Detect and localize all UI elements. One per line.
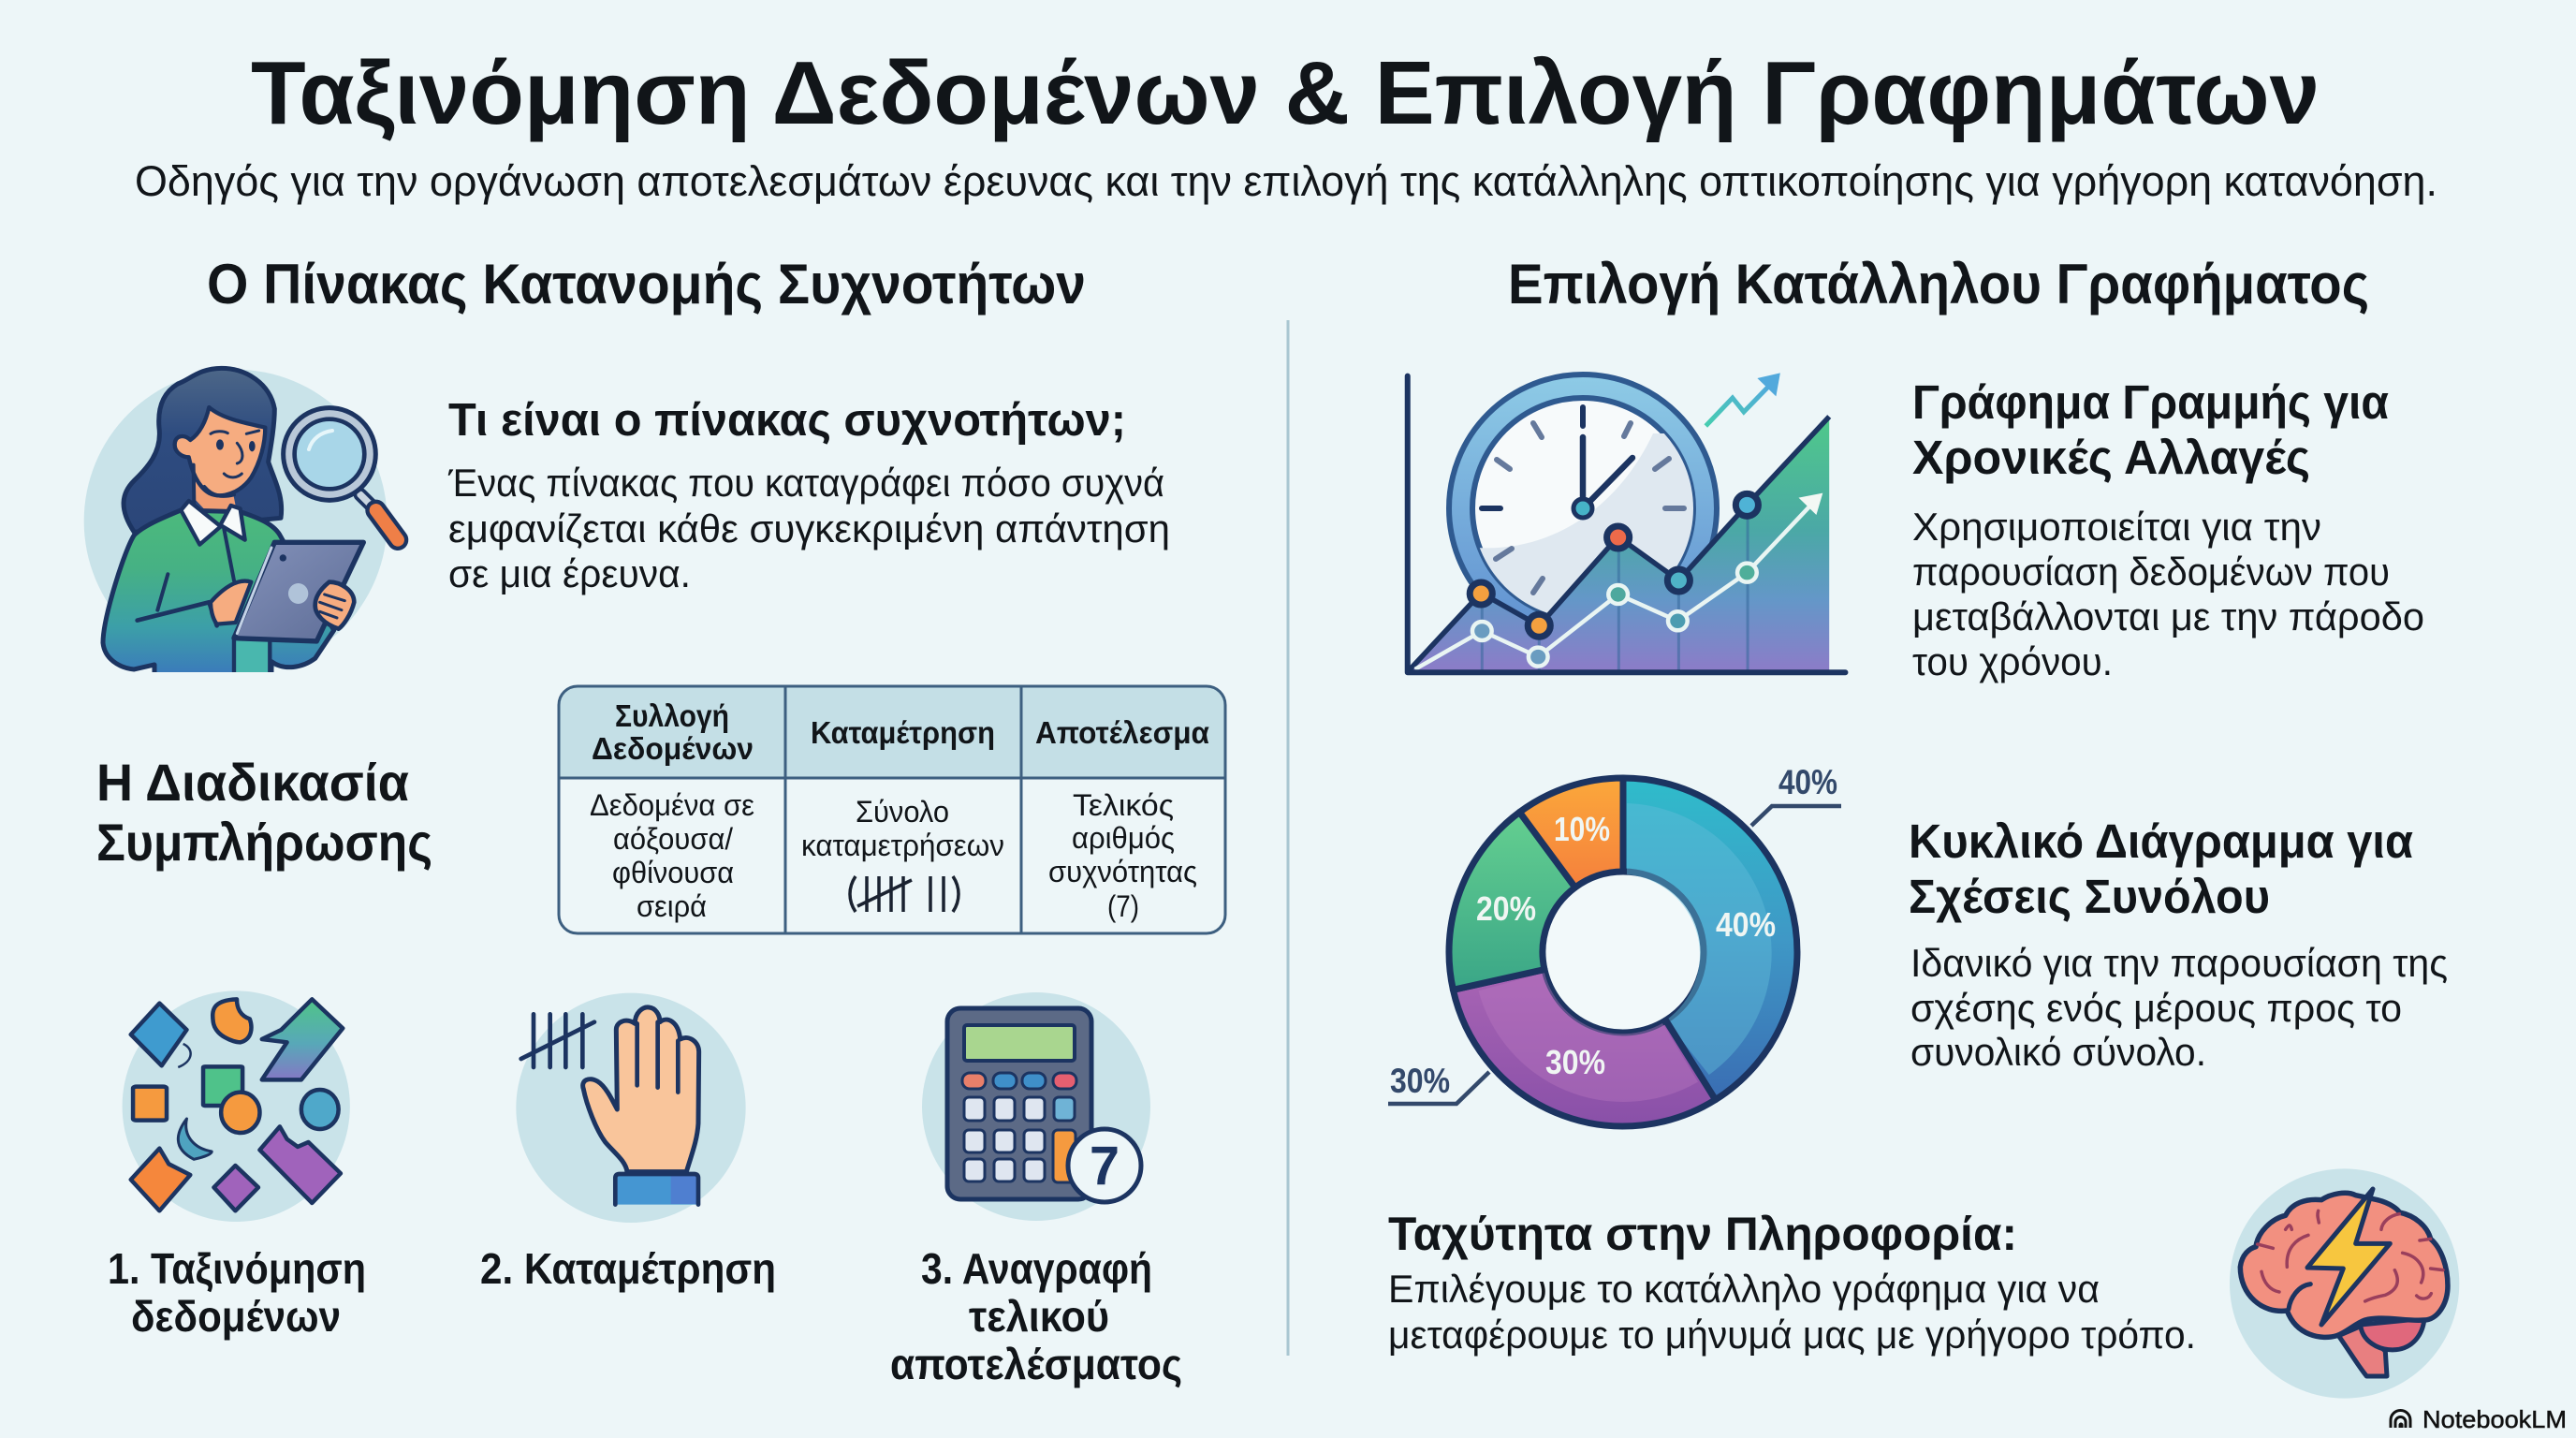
donut segment 30% highlight bbox=[1479, 973, 1698, 1102]
table body cells: καταμετρήσεων bbox=[801, 829, 1004, 862]
donut text: σχέσης ενός μέρους προς το bbox=[1910, 986, 2402, 1030]
heading: what is the table: Τι είναι ο πίνακας συχνοτήτων; bbox=[448, 395, 1126, 446]
donut inner labels: 40% bbox=[1716, 905, 1776, 944]
table body cells: αριθμός bbox=[1072, 821, 1175, 855]
donut segment 40% bbox=[1623, 778, 1797, 1100]
step 3 label: αποτελέσματος bbox=[890, 1340, 1182, 1388]
step 3 label: τελικού bbox=[969, 1292, 1109, 1341]
donut inner labels: 10% bbox=[1554, 810, 1610, 848]
donut segment 10% bbox=[1519, 778, 1623, 888]
table: process columns bbox=[559, 686, 1225, 933]
definition text: εμφανίζεται κάθε συγκεκριμένη απάντηση bbox=[448, 506, 1170, 550]
icon: brain with lightning bbox=[2230, 1168, 2459, 1399]
line chart bbox=[1408, 373, 1845, 672]
line chart text: παρουσίαση δεδομένων που bbox=[1912, 550, 2390, 594]
donut segment 30% bbox=[1453, 970, 1716, 1126]
donut inner labels: 20% bbox=[1476, 889, 1536, 928]
speed text: μεταφέρουμε το μήνυμά μας με γρήγορο τρόπο. bbox=[1388, 1313, 2196, 1357]
heading: left column: Ο Πίνακας Κατανομής Συχνοτήτων bbox=[207, 253, 1086, 315]
table body cells: συχνότητας bbox=[1048, 855, 1197, 888]
icon: clock over line chart bbox=[1408, 373, 1845, 672]
table body cells: Δεδομένα σε bbox=[590, 788, 754, 822]
table header cells: Συλλογή bbox=[615, 698, 729, 733]
panel: what is a frequency table bbox=[447, 395, 1170, 595]
line chart text: μεταβάλλονται με την πάροδο bbox=[1912, 594, 2424, 638]
heading: completion process: Η Διαδικασία bbox=[96, 753, 409, 812]
icon: scattered shapes bbox=[123, 990, 350, 1222]
line chart heading bbox=[1912, 375, 2389, 484]
step 3 label: 3. Αναγραφή bbox=[921, 1244, 1152, 1293]
line chart text: του χρόνου. bbox=[1912, 639, 2113, 683]
donut text: Ιδανικό για την παρουσίαση της bbox=[1910, 941, 2448, 985]
definition text: Ένας πίνακας που καταγράφει πόσο συχνά bbox=[447, 461, 1164, 505]
line chart text bbox=[1912, 505, 2424, 683]
step 1 label bbox=[108, 1244, 366, 1341]
step labels bbox=[108, 1244, 1182, 1388]
callout 30% bbox=[1388, 1062, 1489, 1104]
icon: calculator with result 7 bbox=[922, 992, 1150, 1221]
table body cells: Σύνολο bbox=[856, 795, 949, 829]
table header cells: Δεδομένων bbox=[592, 731, 754, 766]
icon: researcher with tablet and magnifier bbox=[84, 368, 398, 677]
panel: line chart description bbox=[1912, 375, 2424, 683]
donut hole bbox=[1543, 872, 1704, 1033]
table header cells: Αποτέλεσμα bbox=[1035, 715, 1209, 750]
icon: calculator with result 7: 7 bbox=[1090, 1136, 1120, 1196]
clock bbox=[1446, 372, 1720, 616]
callout 40% bbox=[1751, 763, 1841, 826]
column divider bbox=[1286, 320, 1290, 1356]
donut heading bbox=[1909, 814, 2413, 923]
speed heading: Ταχύτητα στην Πληροφορία: bbox=[1388, 1208, 2017, 1260]
title: Ταξινόμηση Δεδομένων & Επιλογή Γραφημάτων bbox=[251, 43, 2320, 143]
donut inner labels: 30% bbox=[1545, 1043, 1605, 1081]
donut segment 20% bbox=[1449, 813, 1575, 990]
tally marks bbox=[850, 876, 959, 912]
donut text: συνολικό σύνολο. bbox=[1910, 1030, 2206, 1074]
donut heading: Κυκλικό Διάγραμμα για bbox=[1909, 814, 2413, 868]
callout 40%: 40% bbox=[1778, 763, 1837, 801]
chart: donut bbox=[1388, 763, 1841, 1126]
table body cells: αόξουσα/ bbox=[613, 822, 733, 856]
heading: completion process: Συμπλήρωσης bbox=[96, 813, 432, 872]
panel: donut description bbox=[1909, 814, 2448, 1074]
callout 30%: 30% bbox=[1390, 1062, 1450, 1100]
subtitle: Οδηγός για την οργάνωση αποτελεσμάτων έρευνας και την επιλογή της κατάλληλης οπτικοποίησης για γρήγορη κατανόηση. bbox=[135, 157, 2437, 205]
donut inner labels bbox=[1476, 810, 1776, 1081]
donut heading: Σχέσεις Συνόλου bbox=[1909, 870, 2270, 923]
step 3 label bbox=[890, 1244, 1182, 1388]
icon: hand with tally marks bbox=[516, 993, 746, 1223]
table header cells: Καταμέτρηση bbox=[811, 715, 995, 750]
donut segment 40% highlight bbox=[1627, 803, 1772, 1075]
table body cells bbox=[590, 788, 1197, 923]
panel: speed of information bbox=[1388, 1208, 2196, 1357]
line chart text: Χρησιμοποιείται για την bbox=[1912, 505, 2321, 549]
definition text bbox=[447, 461, 1170, 595]
speed text: Επιλέγουμε το κατάλληλο γράφημα για να bbox=[1388, 1267, 2100, 1311]
definition text: σε μια έρευνα. bbox=[448, 551, 691, 595]
speed text bbox=[1388, 1267, 2196, 1357]
donut text bbox=[1910, 941, 2448, 1074]
step 2 label: 2. Καταμέτρηση bbox=[480, 1244, 776, 1293]
step 1 label: δεδομένων bbox=[131, 1292, 341, 1341]
table header cells bbox=[592, 698, 1209, 766]
line chart heading: Γράφημα Γραμμής για bbox=[1912, 375, 2389, 429]
table body cells: σειρά bbox=[637, 889, 707, 923]
line chart heading: Χρονικές Αλλαγές bbox=[1912, 431, 2310, 484]
table body cells: Τελικός bbox=[1073, 788, 1174, 822]
heading: completion process bbox=[96, 753, 432, 872]
table body cells: φθίνουσα bbox=[612, 856, 734, 889]
watermark: NotebookLM: NotebookLM bbox=[2422, 1405, 2567, 1433]
heading: right column: Επιλογή Κατάλληλου Γραφήματος bbox=[1508, 253, 2369, 315]
table body cells: (7) bbox=[1107, 889, 1139, 923]
step 1 label: 1. Ταξινόμηση bbox=[108, 1244, 366, 1293]
